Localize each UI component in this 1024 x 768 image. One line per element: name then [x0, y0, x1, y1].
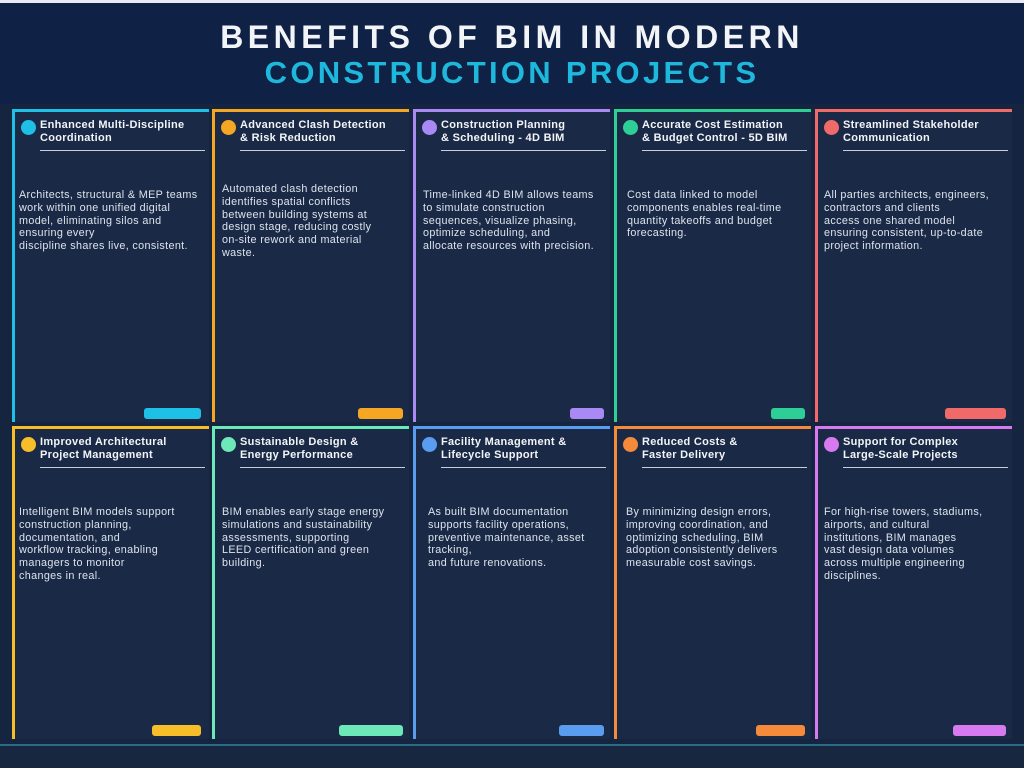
body [222, 506, 384, 569]
body: workflow tracking, enabling [19, 544, 158, 556]
icon dot [221, 437, 236, 452]
card: stakeholder communication [815, 109, 1012, 422]
body [627, 189, 781, 239]
heading: Accurate Cost Estimation [642, 119, 783, 131]
pill [559, 725, 604, 736]
body: and future renovations. [428, 557, 546, 569]
body: ensuring consistent, up-to-date [824, 227, 983, 239]
body: optimizing scheduling, BIM [626, 532, 764, 544]
body: Cost data linked to model [627, 189, 758, 201]
body: across multiple engineering [824, 557, 965, 569]
heading [240, 119, 405, 151]
title line 1: BENEFITS OF BIM IN MODERN [220, 19, 804, 55]
heading: Support for Complex [843, 436, 958, 448]
heading: Enhanced Multi-Discipline [40, 119, 184, 131]
pill [358, 408, 403, 419]
heading [843, 436, 1008, 468]
body: assessments, supporting [222, 532, 349, 544]
heading: Streamlined Stakeholder [843, 119, 979, 131]
title line 2: CONSTRUCTION PROJECTS [265, 55, 759, 90]
body: optimize scheduling, and [423, 227, 550, 239]
body: supports facility operations, [428, 519, 569, 531]
icon dot [623, 437, 638, 452]
card: large-scale projects [815, 426, 1012, 739]
body: work within one unified digital [19, 202, 170, 214]
body: components enables real-time [627, 202, 781, 214]
heading: & Scheduling - 4D BIM [441, 132, 565, 144]
body: to simulate construction [423, 202, 545, 214]
body: By minimizing design errors, [626, 506, 771, 518]
body [222, 183, 371, 259]
body: Automated clash detection [222, 183, 358, 195]
heading: Advanced Clash Detection [240, 119, 386, 131]
card: reduced costs [614, 426, 811, 739]
pill [570, 408, 604, 419]
body: adoption consistently delivers [626, 544, 778, 556]
card: clash detection [212, 109, 409, 422]
heading: Construction Planning [441, 119, 565, 131]
heading [40, 119, 205, 151]
body: vast design data volumes [824, 544, 954, 556]
body [423, 189, 594, 252]
body: airports, and cultural [824, 519, 930, 531]
heading: Energy Performance [240, 448, 353, 460]
body: improving coordination, and [626, 519, 768, 531]
body: quantity takeoffs and budget [627, 215, 772, 227]
pill [152, 725, 201, 736]
body: discipline shares live, consistent. [19, 240, 188, 252]
heading [642, 119, 807, 151]
body: project information. [824, 240, 923, 252]
body: tracking, [428, 544, 472, 556]
body: forecasting. [627, 227, 687, 239]
body: LEED certification and green [222, 544, 369, 556]
body: institutions, BIM manages [824, 532, 956, 544]
icon dot [21, 437, 36, 452]
heading: Project Management [40, 448, 153, 460]
card: coordination [12, 109, 209, 422]
heading: Communication [843, 132, 930, 144]
heading [240, 436, 405, 468]
body: For high-rise towers, stadiums, [824, 506, 982, 518]
heading: & Budget Control - 5D BIM [642, 132, 788, 144]
heading: Faster Delivery [642, 448, 725, 460]
body: As built BIM documentation [428, 506, 569, 518]
card: architectural management [12, 426, 209, 739]
body: disciplines. [824, 570, 881, 582]
heading: & Risk Reduction [240, 132, 336, 144]
heading [441, 436, 606, 468]
heading: Large-Scale Projects [843, 448, 958, 460]
body: preventive maintenance, asset [428, 532, 585, 544]
heading: Facility Management & [441, 436, 566, 448]
heading: Lifecycle Support [441, 448, 538, 460]
body: construction planning, [19, 519, 132, 531]
body: design stage, reducing costly [222, 221, 371, 233]
heading: Coordination [40, 132, 112, 144]
body [824, 189, 989, 252]
icon dot [21, 120, 36, 135]
body: All parties architects, engineers, [824, 189, 989, 201]
body: documentation, and [19, 532, 120, 544]
body: Intelligent BIM models support [19, 506, 175, 518]
heading [40, 436, 205, 468]
header [0, 0, 1024, 104]
pill [771, 408, 805, 419]
body: ensuring every [19, 227, 95, 239]
heading: Reduced Costs & [642, 436, 738, 448]
body: changes in real. [19, 570, 101, 582]
pill [144, 408, 201, 419]
body: waste. [222, 247, 255, 259]
body: identifies spatial conflicts [222, 196, 351, 208]
card: facility management [413, 426, 610, 739]
heading: Improved Architectural [40, 436, 167, 448]
body: allocate resources with precision. [423, 240, 594, 252]
body [428, 506, 585, 569]
heading [642, 436, 807, 468]
pill [339, 725, 403, 736]
body: sequences, visualize phasing, [423, 215, 577, 227]
body: managers to monitor [19, 557, 125, 569]
body [19, 506, 175, 582]
body [19, 189, 198, 252]
icon dot [824, 120, 839, 135]
heading [843, 119, 1008, 151]
body: between building systems at [222, 209, 367, 221]
heading: Sustainable Design & [240, 436, 358, 448]
body: measurable cost savings. [626, 557, 756, 569]
body: on-site rework and material [222, 234, 362, 246]
body: model, eliminating silos and [19, 215, 161, 227]
pill [756, 725, 805, 736]
icon dot [422, 120, 437, 135]
body: Time-linked 4D BIM allows teams [423, 189, 594, 201]
footer bar [0, 744, 1024, 768]
icon dot [221, 120, 236, 135]
body [824, 506, 982, 582]
card: sustainable design [212, 426, 409, 739]
icon dot [824, 437, 839, 452]
card: 5D BIM [614, 109, 811, 422]
heading [441, 119, 606, 151]
pill [945, 408, 1006, 419]
body: building. [222, 557, 265, 569]
body: contractors and clients [824, 202, 940, 214]
body [626, 506, 778, 569]
icon dot [422, 437, 437, 452]
icon dot [623, 120, 638, 135]
pill [953, 725, 1006, 736]
card: 4D BIM [413, 109, 610, 422]
body: Architects, structural & MEP teams [19, 189, 198, 201]
body: BIM enables early stage energy [222, 506, 384, 518]
body: access one shared model [824, 215, 955, 227]
body: simulations and sustainability [222, 519, 372, 531]
